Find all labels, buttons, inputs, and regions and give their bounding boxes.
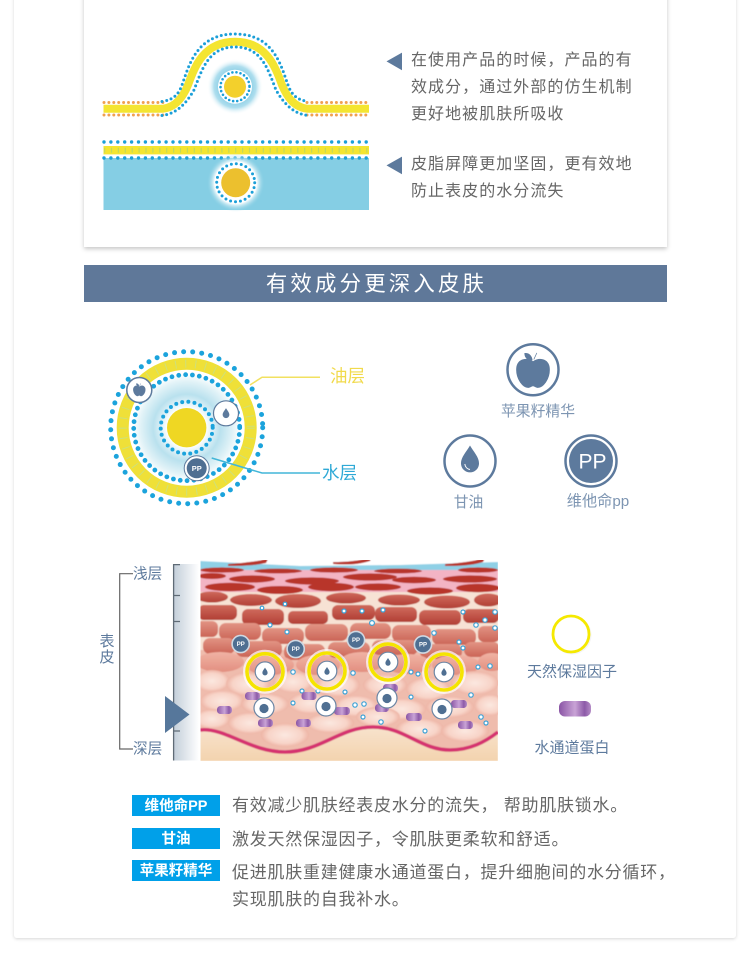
PP markers: PP: [419, 642, 427, 648]
ingredient: glycerin: 甘油: [162, 830, 190, 848]
icon: PP marker: PP: [192, 464, 202, 473]
PP markers: [232, 631, 432, 658]
natural moisturizing factor rings: [246, 643, 463, 691]
icon: depth arrow: [165, 696, 190, 733]
ingredient: glycerin: 激发天然保湿因子，令肌肤更柔软和舒适。: [232, 830, 569, 849]
ingredient: apple seed essence: 促进肌肤重建健康水通道蛋白，提升细胞间的水分循环，: [232, 863, 676, 882]
illustration: skin cross-section: [194, 557, 506, 761]
legend: natural moisturizing factor: [527, 616, 617, 680]
label: shallow layer: 浅层: [133, 566, 162, 582]
text block: absorption: 在使用产品的时候，产品的有: [411, 51, 633, 69]
bracket: epidermis depth: [99, 566, 162, 758]
icon: drop marker: [214, 401, 238, 426]
upper red cells: [196, 592, 502, 625]
ingredient: apple seed essence: 苹果籽精华: [140, 862, 212, 880]
text block: barrier: 防止表皮的水分流失: [411, 182, 564, 200]
diagram: absorption bump: [104, 34, 369, 116]
legend: water channel protein: 水通道蛋白: [534, 740, 610, 756]
callout: oil layer: [250, 366, 365, 386]
middle cells: [196, 621, 500, 660]
label: epidermis: 表: [99, 633, 115, 650]
apple markers: [254, 688, 452, 719]
ingredient: glycerin: [132, 828, 569, 849]
label: apple seed essence: 苹果籽精华: [501, 403, 575, 420]
diagram: strengthened barrier: [104, 142, 369, 212]
dermis: [200, 727, 498, 761]
skin flakes: [198, 557, 500, 595]
callout: water layer: 水层: [322, 463, 357, 483]
callout: water layer: [212, 458, 357, 483]
water droplets: [260, 602, 497, 733]
icon: arrow one: [386, 53, 402, 70]
callout: oil layer: 油层: [330, 366, 365, 386]
icon: arrow two: [386, 157, 402, 174]
ingredient: apple seed essence: [132, 860, 676, 909]
text block: barrier: 皮脂屏障更加坚固，更有效地: [411, 155, 633, 173]
text block: absorption: 效成分，通过外部的仿生机制: [411, 78, 633, 96]
icon group: ingredients: [444, 344, 629, 511]
heading: [84, 265, 667, 302]
label: deep layer: 深层: [133, 740, 162, 758]
water channel proteins: [217, 684, 473, 729]
ingredient: vitamin PP: 维他命PP: [145, 796, 208, 814]
legend: water channel protein: [534, 701, 610, 756]
PP markers: PP: [352, 638, 360, 644]
text block: absorption: 更好地被肌肤所吸收: [411, 105, 564, 123]
label: vitamin PP: 维他命pp: [567, 492, 629, 510]
heading: 有效成分更深入皮肤: [266, 272, 487, 296]
panel: top mechanism card: [84, 0, 667, 247]
icon: vitamin PP: PP: [578, 450, 607, 474]
icon: vitamin PP: [566, 436, 616, 486]
label: epidermis: 皮: [99, 649, 115, 666]
legend: natural moisturizing factor: 天然保湿因子: [527, 664, 617, 680]
depth ruler: [165, 564, 199, 760]
icon: apple marker: [127, 378, 152, 402]
ingredient: vitamin PP: 有效减少肌肤经表皮水分的流失， 帮助肌肤锁水。: [232, 796, 628, 815]
ingredient: apple seed essence: 实现肌肤的自我补水。: [232, 890, 410, 909]
pale lower cells: [194, 670, 506, 747]
PP markers: PP: [292, 647, 300, 653]
icon: apple seed essence: [508, 344, 558, 395]
icon: glycerin: [444, 436, 496, 486]
label: glycerin: 甘油: [454, 494, 483, 511]
diagram: liposome: [111, 352, 365, 504]
PP markers: PP: [237, 642, 245, 648]
icon: PP marker: [184, 456, 209, 481]
